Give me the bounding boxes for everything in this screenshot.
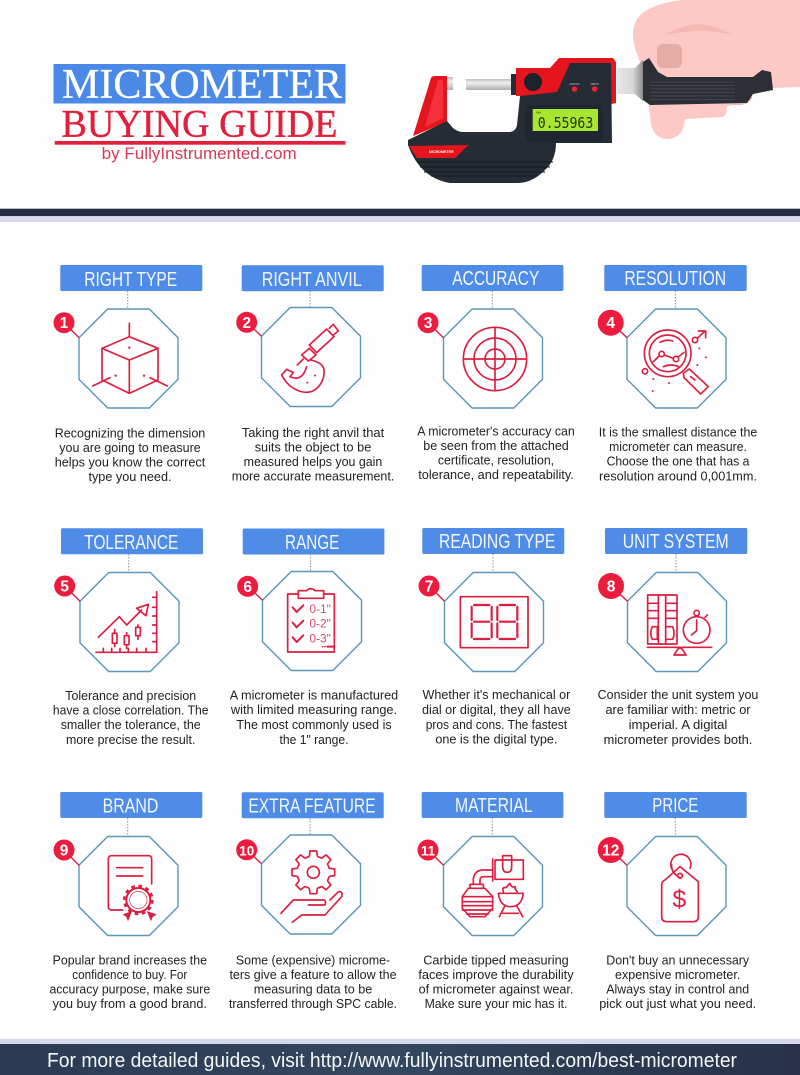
text: price: pick out just what you need. bbox=[599, 996, 756, 1011]
text: range: The most commonly used is bbox=[236, 717, 392, 732]
octagon with number badge 10: 10 bbox=[239, 843, 254, 858]
octagon with number badge 12 bbox=[598, 836, 726, 936]
text: accuracy: certificate, resolution, bbox=[438, 452, 554, 468]
header: right type: RIGHT TYPE bbox=[84, 268, 177, 291]
header: resolution: RESOLUTION bbox=[624, 267, 726, 290]
text: tolerance: smaller the tolerance, the bbox=[61, 717, 201, 732]
footer banner: For more detailed guides, visit http://www.fullyinstrumented.com/best-micrometer bbox=[47, 1050, 737, 1072]
icon: cube bbox=[93, 323, 167, 393]
header: material bbox=[422, 792, 563, 818]
card 4: resolution bbox=[598, 265, 757, 484]
text: extra feature: transferred through SPC cable. bbox=[229, 996, 397, 1011]
text: price: Always stay in control and bbox=[606, 982, 749, 996]
octagon with number badge 7: 7 bbox=[425, 578, 433, 596]
text: material: Make sure your mic has it. bbox=[425, 996, 567, 1011]
octagon with number badge 8: 8 bbox=[607, 578, 616, 596]
octagon with number badge 11 bbox=[418, 836, 542, 936]
text: tolerance: have a close correlation. The bbox=[53, 702, 208, 718]
text: resolution: micrometer can measure. bbox=[609, 439, 747, 454]
octagon with number badge 5: 5 bbox=[60, 578, 69, 596]
text: unit system: micrometer provides both. bbox=[604, 732, 752, 747]
text: right anvil: Taking the right anvil that bbox=[242, 425, 385, 440]
text: price: expensive micrometer. bbox=[615, 967, 740, 982]
icon: crucible and furnace bbox=[462, 856, 523, 917]
header: unit system: UNIT SYSTEM bbox=[623, 530, 729, 553]
icon: gear over open hand bbox=[281, 851, 342, 922]
header: accuracy: ACCURACY bbox=[452, 267, 540, 290]
illustration: hand holding digital micrometer: ON/OFF bbox=[569, 82, 580, 86]
octagon with number badge 8 bbox=[598, 572, 726, 672]
card 1: right type bbox=[54, 265, 206, 484]
text: material: faces improve the durability bbox=[418, 967, 574, 982]
card 8: unit system bbox=[598, 528, 758, 747]
text: right anvil: more accurate measurement. bbox=[232, 468, 394, 484]
octagon with number badge 4: 4 bbox=[606, 315, 615, 332]
octagon with number badge 9: 9 bbox=[60, 842, 69, 860]
header: material: MATERIAL bbox=[455, 794, 533, 817]
illustration: hand holding digital micrometer: MM/IN bbox=[591, 82, 599, 86]
icon: clipboard with ranges bbox=[288, 589, 334, 652]
icon: clipboard with ranges: 0-1" bbox=[309, 602, 331, 616]
octagon with number badge 4 bbox=[598, 309, 726, 408]
text: tolerance bbox=[53, 688, 208, 747]
text: right type bbox=[55, 426, 206, 484]
octagon with number badge 2: 2 bbox=[242, 315, 251, 332]
title block bbox=[54, 62, 346, 163]
text: unit system: Consider the unit system you bbox=[598, 687, 758, 702]
octagon with number badge 6 bbox=[237, 572, 362, 670]
text: right type: you are going to measure bbox=[59, 440, 201, 455]
octagon with number badge 6: 6 bbox=[243, 579, 252, 596]
text: resolution: It is the smallest distance the bbox=[599, 424, 757, 440]
text: price: Don't buy an unnecessary bbox=[606, 952, 750, 968]
text: brand: accuracy purpose, make sure bbox=[49, 982, 210, 996]
text: brand: confidence to buy. For bbox=[72, 967, 188, 982]
text: extra feature bbox=[229, 952, 397, 1011]
text: extra feature: Some (expensive) microme- bbox=[236, 952, 390, 968]
text: right type: type you need. bbox=[88, 469, 172, 484]
title block: MICROMETER bbox=[62, 62, 342, 108]
text: accuracy: be seen from the attached bbox=[423, 438, 569, 453]
text: tolerance: more precise the result. bbox=[66, 732, 195, 747]
header: price bbox=[604, 792, 747, 818]
header: range: RANGE bbox=[285, 531, 339, 554]
text: resolution bbox=[599, 424, 757, 484]
header: tolerance: TOLERANCE bbox=[84, 531, 178, 554]
octagon with number badge 2 bbox=[236, 308, 360, 406]
icon: certificate with seal bbox=[108, 856, 157, 921]
icon: candlestick chart bbox=[96, 592, 157, 652]
illustration: hand holding digital micrometer bbox=[408, 0, 800, 183]
octagon with number badge 9 bbox=[54, 836, 178, 936]
icon: price tag: $ bbox=[672, 885, 686, 913]
text: unit system bbox=[598, 687, 758, 747]
octagon with number badge 5 bbox=[54, 572, 179, 672]
header: right anvil: RIGHT ANVIL bbox=[262, 268, 362, 291]
illustration: hand holding digital micrometer: MM bbox=[536, 110, 541, 114]
header: brand bbox=[60, 792, 202, 818]
title block: by FullyInstrumented.com bbox=[102, 145, 297, 163]
header: accuracy bbox=[422, 265, 563, 291]
icon: seven-segment display bbox=[460, 597, 528, 648]
text: right anvil bbox=[232, 425, 394, 484]
text: tolerance: Tolerance and precision bbox=[65, 688, 196, 703]
text: brand: you buy from a good brand. bbox=[53, 996, 207, 1011]
octagon with number badge 1: 1 bbox=[60, 315, 69, 332]
text: reading type: dial or digital, they all have bbox=[422, 702, 571, 717]
header: price: PRICE bbox=[652, 794, 698, 817]
icon: micrometer outline bbox=[282, 324, 338, 392]
icon: price tag bbox=[662, 854, 698, 922]
octagon with number badge 11: 11 bbox=[421, 844, 436, 858]
card 11: material bbox=[418, 792, 574, 1011]
card 6: range bbox=[230, 528, 398, 747]
text: range: with limited measuring range. bbox=[230, 702, 397, 717]
text: accuracy: tolerance, and repeatability. bbox=[418, 467, 574, 482]
icon: magnifier with chart bbox=[642, 330, 708, 394]
text: range bbox=[230, 688, 398, 747]
text: range: A micrometer is manufactured bbox=[230, 688, 398, 702]
text: reading type: one is the digital type. bbox=[435, 732, 557, 746]
text: extra feature: measuring data to be bbox=[254, 982, 372, 996]
card 5: tolerance bbox=[53, 528, 208, 747]
text: right type: Recognizing the dimension bbox=[55, 426, 205, 440]
text: material: Carbide tipped measuring bbox=[423, 952, 569, 968]
card 3: accuracy bbox=[417, 265, 575, 482]
card 9: brand bbox=[49, 792, 210, 1011]
header: reading type: READING TYPE bbox=[439, 530, 555, 553]
text: brand bbox=[49, 952, 210, 1011]
text: accuracy: A micrometer's accuracy can bbox=[417, 424, 575, 438]
icon: clipboard with ranges: 0-3" bbox=[309, 632, 331, 646]
text: material bbox=[418, 952, 574, 1011]
text: material: of micrometer against wear. bbox=[419, 982, 573, 996]
text: extra feature: ters give a feature to allow the bbox=[229, 967, 397, 982]
card 12: price bbox=[598, 792, 756, 1011]
text: accuracy bbox=[417, 424, 575, 482]
top divider band bbox=[0, 209, 800, 222]
text: right type: helps you know the correct bbox=[55, 454, 206, 470]
text: unit system: are familiar with: metric or bbox=[605, 702, 751, 717]
card 2: right anvil bbox=[232, 265, 394, 484]
header: brand: BRAND bbox=[103, 795, 158, 818]
title block: BUYING GUIDE bbox=[62, 102, 338, 146]
icon: books and stopwatch on scale bbox=[647, 595, 712, 655]
illustration: hand holding digital micrometer: 0.55963 bbox=[538, 114, 593, 132]
octagon with number badge 3 bbox=[418, 309, 542, 408]
text: right anvil: measured helps you gain bbox=[244, 454, 382, 469]
icon: target bbox=[463, 327, 527, 391]
text: range: the 1" range. bbox=[280, 732, 348, 747]
text: reading type bbox=[422, 687, 571, 746]
footer banner bbox=[0, 1039, 800, 1075]
icon: clipboard with ranges: 0-2" bbox=[309, 617, 331, 631]
header: reading type bbox=[422, 528, 564, 554]
text: unit system: imperial. A digital bbox=[629, 717, 727, 732]
text: resolution: resolution around 0,001mm. bbox=[599, 468, 757, 484]
header: range bbox=[243, 528, 384, 554]
text: brand: Popular brand increases the bbox=[53, 952, 207, 968]
octagon with number badge 10 bbox=[236, 835, 360, 934]
header: extra feature: EXTRA FEATURE bbox=[248, 795, 376, 818]
text: reading type: pros and cons. The fastest bbox=[426, 717, 567, 732]
text: resolution: Choose the one that has a bbox=[607, 454, 750, 468]
card 10: extra feature bbox=[229, 792, 397, 1011]
octagon with number badge 3: 3 bbox=[424, 315, 433, 332]
octagon with number badge 7 bbox=[418, 572, 544, 672]
text: right anvil: suits the object to be bbox=[255, 440, 371, 454]
octagon with number badge 12: 12 bbox=[602, 842, 619, 860]
card 7: reading type bbox=[418, 528, 571, 746]
illustration: hand holding digital micrometer: MICROMETER bbox=[429, 150, 454, 154]
text: reading type: Whether it's mechanical or bbox=[422, 687, 571, 702]
octagon with number badge 1 bbox=[54, 309, 178, 408]
text: price bbox=[599, 952, 756, 1011]
